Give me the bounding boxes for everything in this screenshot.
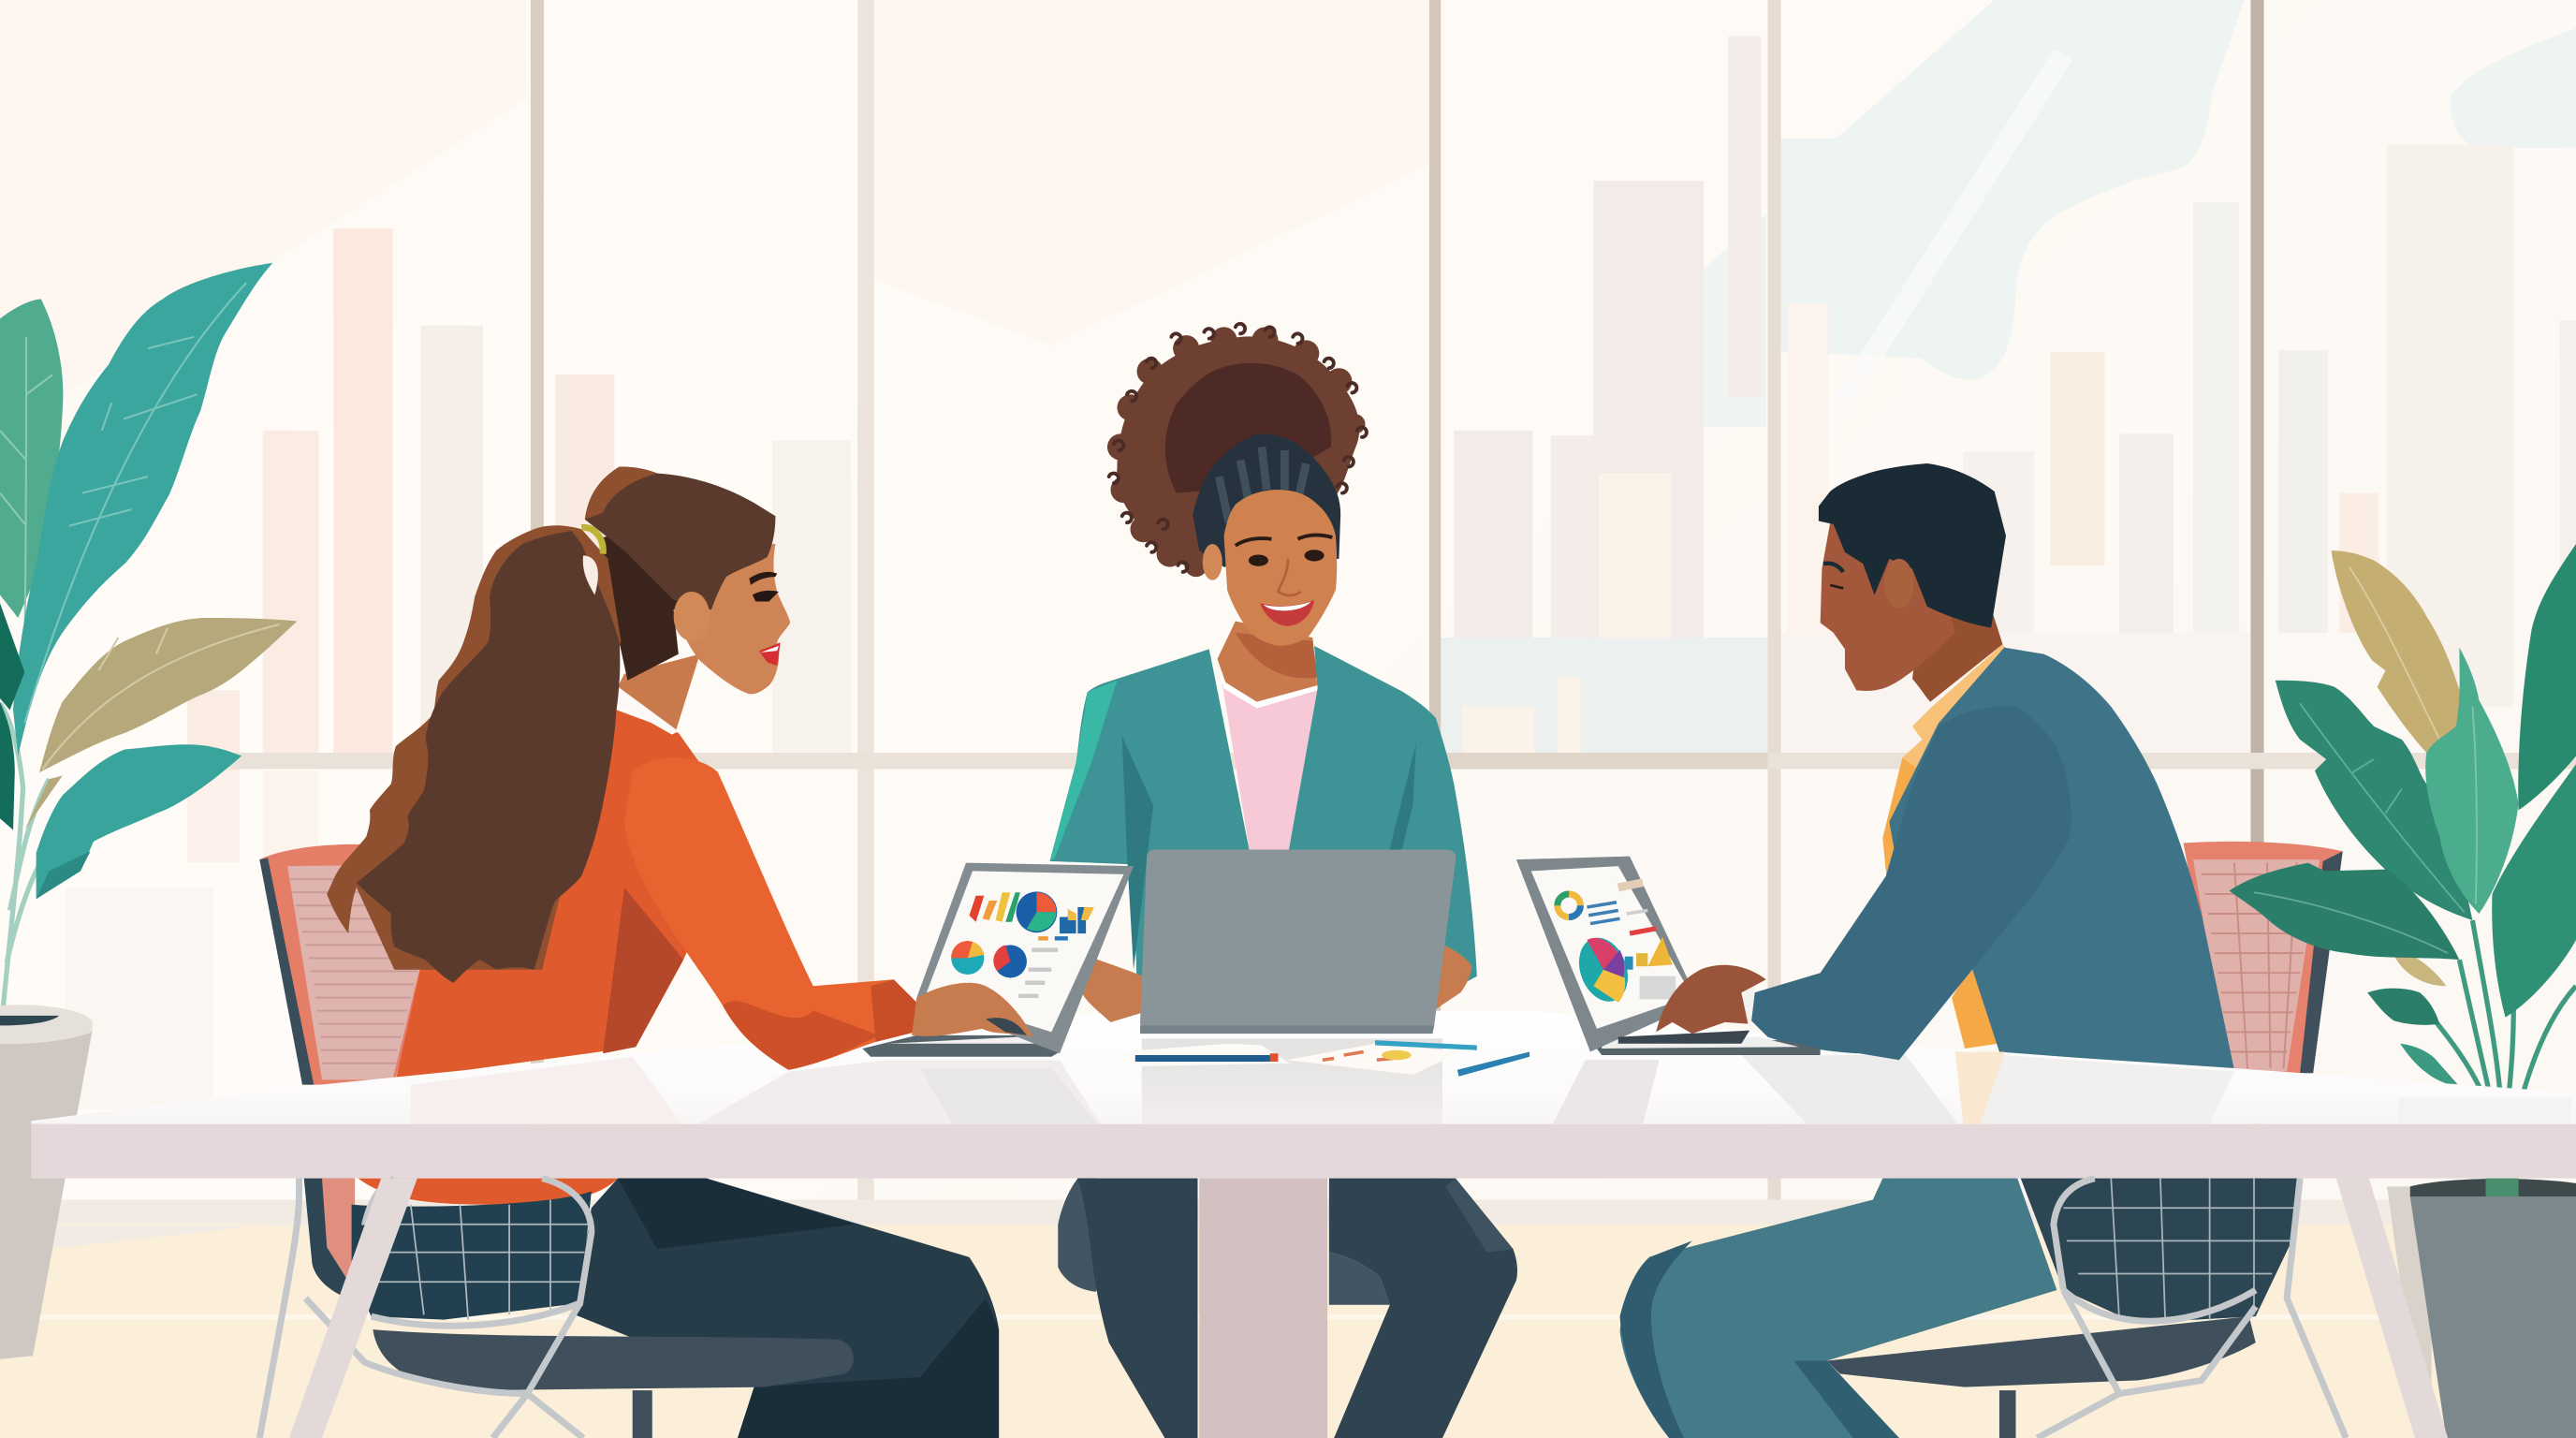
collar — [611, 685, 679, 735]
leaf: small — [2367, 989, 2439, 1025]
chair frame — [304, 1179, 352, 1299]
ear — [1203, 544, 1222, 580]
lips — [759, 642, 781, 666]
paper right — [1286, 1044, 1460, 1075]
post — [1999, 1390, 2016, 1438]
orange below table — [359, 1179, 618, 1205]
afro — [1107, 324, 1367, 577]
brows — [1236, 536, 1332, 546]
seat right — [1329, 1253, 1390, 1305]
pants — [1620, 1179, 2056, 1438]
seat — [373, 1329, 854, 1390]
table front edge — [31, 1124, 2576, 1179]
post — [633, 1390, 652, 1438]
wire back panel — [352, 1192, 592, 1320]
pot — [2410, 1196, 2576, 1438]
face — [1821, 522, 1955, 691]
pen blue top — [1375, 1040, 1477, 1050]
under-table: left woman legs and chair — [259, 1179, 999, 1438]
sweater shadow — [603, 888, 683, 1053]
under-table: right man legs and chair — [1620, 1179, 2448, 1438]
lid — [1516, 857, 1699, 1051]
sleeve: right man — [1741, 706, 2071, 1060]
face — [679, 542, 790, 694]
left chair back — [259, 844, 431, 1085]
hair tie — [581, 527, 603, 554]
person: centre woman — [1050, 324, 1477, 986]
window frames — [230, 0, 2576, 1199]
leaf: small low — [2400, 1044, 2459, 1086]
keyboard — [1618, 1031, 1749, 1044]
wire frame — [2037, 1179, 2346, 1438]
wire back panel — [2021, 1179, 2300, 1323]
leaf: khaki — [2331, 550, 2513, 805]
table leg right — [2336, 1179, 2448, 1438]
leaf: khaki — [39, 618, 298, 772]
shirt below table — [1893, 1179, 2014, 1199]
hair cap — [585, 467, 775, 609]
stems — [2420, 920, 2576, 1098]
leaf: left low — [2230, 863, 2459, 960]
mouth — [1260, 600, 1314, 626]
ear — [1884, 559, 1914, 609]
table — [31, 1011, 2576, 1438]
hand: left woman — [912, 983, 1033, 1037]
leaf: dark green upper — [2276, 681, 2472, 920]
seat — [1827, 1316, 2256, 1387]
reflections — [411, 1057, 681, 1124]
leaf: lower teal — [37, 744, 242, 899]
braided head wrap — [1193, 433, 1340, 567]
papers and pens — [1119, 1040, 1530, 1077]
floor — [0, 1225, 2576, 1438]
laptop: right — [1516, 857, 1821, 1055]
skyline: right buildings — [1441, 0, 2576, 753]
ponytail inner — [357, 531, 620, 983]
grid lines — [2063, 1179, 2297, 1323]
leaf: top right — [2518, 544, 2576, 810]
base — [1590, 1040, 1821, 1055]
sweater torso — [396, 707, 723, 1079]
seat left — [1058, 1179, 1117, 1292]
cardigan — [1050, 646, 1477, 986]
leaf: big teal — [13, 263, 272, 756]
laptop: left — [862, 863, 1134, 1057]
chair coral and mesh — [322, 1179, 355, 1279]
neck — [1218, 622, 1318, 723]
lid — [916, 863, 1134, 1053]
under-table: centre woman legs — [1058, 1179, 1517, 1438]
right leg — [1329, 1179, 1517, 1438]
shirt — [1882, 644, 2008, 888]
leaf: light green — [2425, 648, 2519, 914]
person: right man body — [1819, 463, 2234, 1199]
screen — [927, 871, 1123, 1032]
hands: centre woman — [1083, 945, 1472, 1022]
eye and brow — [749, 572, 777, 585]
jacket torso — [1889, 648, 2234, 1070]
pants — [575, 1179, 999, 1438]
laptop: centre — [1140, 850, 1456, 1034]
face — [1224, 490, 1337, 646]
stem below table — [2485, 1177, 2519, 1196]
screen — [1531, 866, 1692, 1029]
person: left woman body — [327, 467, 790, 1205]
hand: right man — [1656, 965, 1766, 1034]
table leg left — [289, 1179, 417, 1438]
neck — [1912, 609, 2002, 702]
charts — [1558, 883, 1676, 1008]
ear — [674, 592, 710, 641]
left leg — [1077, 1179, 1197, 1438]
leaf: big right — [2492, 764, 2576, 1018]
nose — [1278, 559, 1301, 595]
shirt — [1222, 683, 1318, 855]
leaf: small khaki — [2391, 946, 2446, 986]
stems — [0, 703, 50, 1005]
skyline: left buildings — [0, 228, 851, 1201]
left plant — [0, 263, 298, 1359]
eyes — [1249, 554, 1268, 566]
right chair back — [2184, 842, 2343, 1073]
tabletop surface — [31, 1011, 2576, 1124]
base — [862, 1035, 1060, 1057]
column — [1199, 1179, 1327, 1438]
sleeve: left woman — [624, 757, 920, 1070]
pencil — [1135, 1055, 1271, 1062]
pot — [0, 1005, 92, 1359]
pen blue low — [1457, 1051, 1530, 1077]
wire frame — [259, 1179, 592, 1438]
leaf: dark green — [0, 603, 24, 710]
grid lines — [361, 1199, 588, 1320]
hair behind ear — [598, 526, 726, 681]
hair — [1819, 463, 2006, 628]
leaf: green back — [0, 299, 63, 618]
eye — [1830, 585, 1843, 588]
ponytail outer — [327, 525, 621, 970]
right plant — [2230, 544, 2576, 1438]
cuff — [1741, 981, 1756, 1022]
paper left — [1119, 1044, 1290, 1066]
pot back — [2387, 1186, 2432, 1438]
charts — [951, 891, 1094, 996]
neck — [614, 654, 700, 733]
